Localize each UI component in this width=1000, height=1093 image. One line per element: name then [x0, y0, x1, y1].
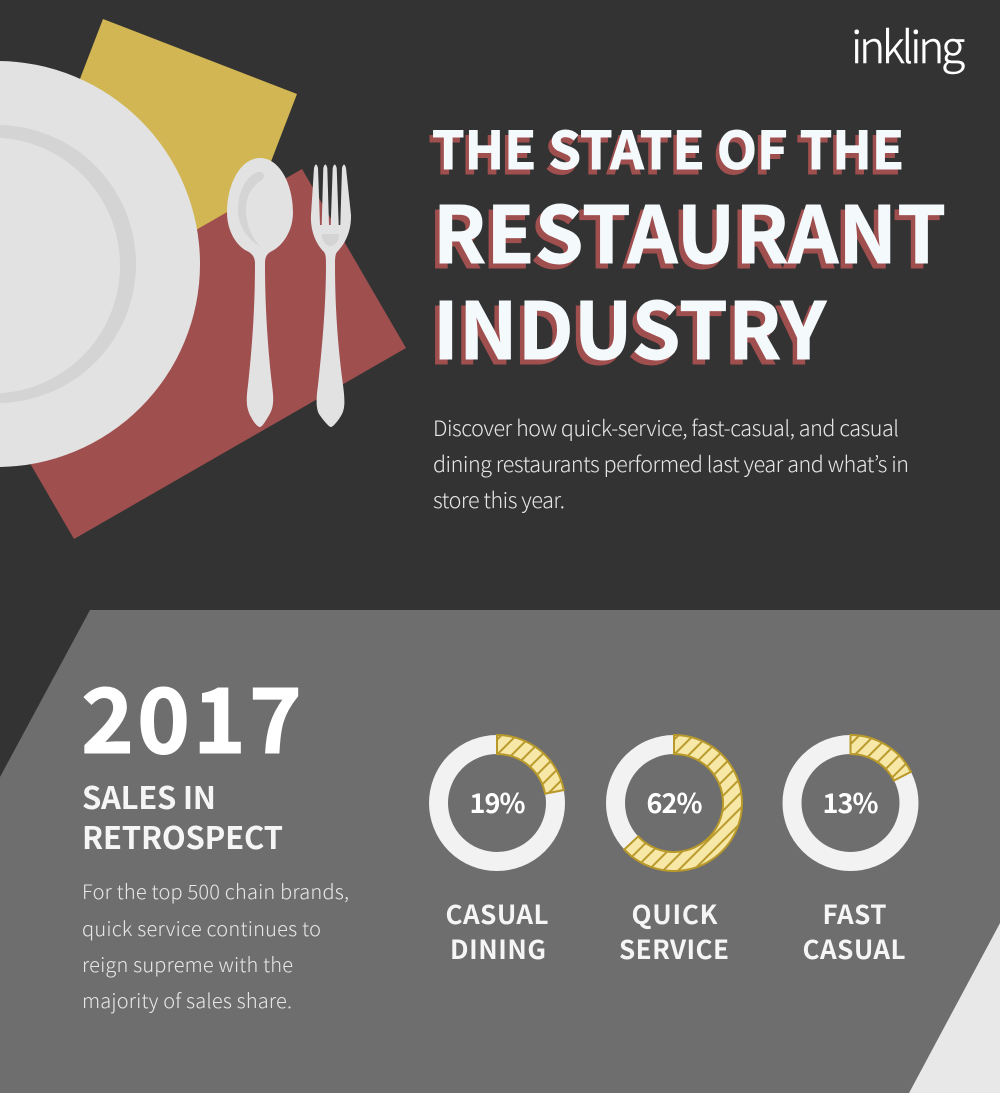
donut chart: casual dining 19%: [438, 735, 564, 862]
donut chart: quick service 62%: [616, 735, 742, 871]
plate: [0, 61, 200, 467]
donut chart: casual dining 19%: 19%: [470, 782, 526, 821]
intro paragraph: dining restaurants performed last year and what’s in: [433, 448, 909, 479]
label: fast casual: CASUAL: [802, 930, 906, 967]
intro paragraph: Discover how quick-service, fast-casual, and casual: [433, 412, 899, 443]
title shadow: RESTAURANT: [428, 179, 942, 291]
sales paragraph: [82, 876, 349, 1014]
sales paragraph: reign supreme with the: [82, 949, 293, 978]
icon: fork: [311, 164, 351, 427]
sales paragraph: majority of sales share.: [82, 985, 292, 1014]
label: quick service: SERVICE: [619, 930, 729, 967]
icon: spoon: [227, 158, 293, 427]
subheading: SALES IN: [82, 773, 216, 818]
donut chart: fast casual 13%: 13%: [822, 782, 878, 821]
label: quick service: [619, 895, 729, 967]
title shadow: INDUSTRY: [428, 275, 822, 387]
label: quick service: QUICK: [632, 895, 718, 932]
title: [428, 109, 946, 387]
title text: INDUSTRY: [433, 270, 827, 382]
year heading: 2017: [81, 649, 302, 779]
label: fast casual: FAST: [822, 895, 886, 932]
sales paragraph: quick service continues to: [82, 913, 321, 942]
intro paragraph: store this year.: [433, 484, 565, 515]
panel: 2017 sales background: [0, 610, 1000, 1093]
label: fast casual: [802, 895, 906, 967]
subheading: RETROSPECT: [82, 813, 283, 858]
title text: RESTAURANT: [433, 174, 946, 286]
label: casual dining: [446, 895, 548, 967]
sales paragraph: For the top 500 chain brands,: [82, 876, 349, 905]
title text: THE STATE OF THE: [432, 109, 904, 184]
donut chart: fast casual 13%: [792, 735, 911, 862]
yellow napkin: [16, 19, 297, 320]
illustration: table setting: [0, 19, 406, 539]
red placemat: [0, 169, 406, 539]
donut chart: quick service 62%: 62%: [646, 782, 702, 821]
corner accent: [909, 923, 1000, 1093]
logo: inkling: inkling: [851, 12, 965, 76]
intro paragraph: [433, 412, 909, 515]
title shadow: [428, 114, 942, 387]
label: casual dining: CASUAL: [446, 895, 548, 932]
title text: [432, 109, 946, 382]
subheading: [82, 773, 283, 858]
label: casual dining: DINING: [450, 930, 546, 967]
title shadow: THE STATE OF THE: [428, 114, 900, 189]
